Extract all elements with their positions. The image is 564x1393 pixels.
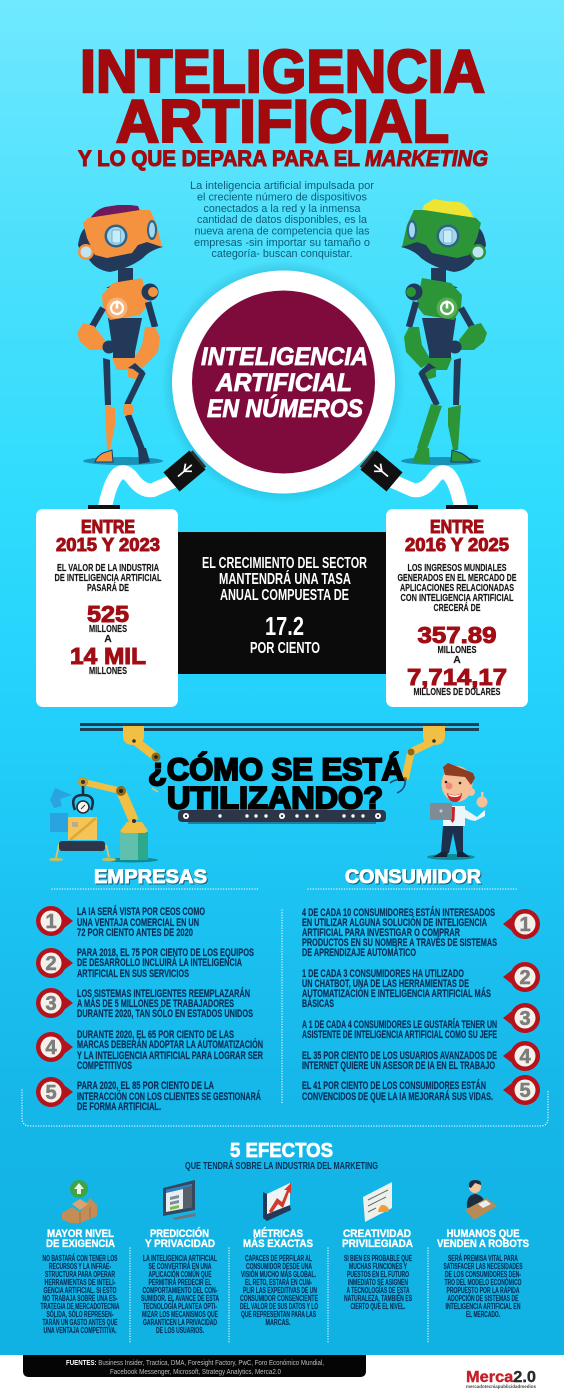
effect: creatividad privilegiada: A TECNOLOGÍAS DE ESTA: [346, 1286, 410, 1295]
item 3: [77, 987, 253, 1020]
marker 2: [36, 948, 73, 978]
item 2: 1 DE CADA 3 CONSUMIDORES HA UTILIZADO: [302, 968, 464, 980]
intro text: [190, 180, 374, 260]
marker 3: [36, 988, 73, 1018]
effect: prediccion y privacidad: APLICACIÓN COMÚN QUE: [148, 1270, 212, 1279]
item 4: MARCAS DEBERÁN ADOPTAR LA AUTOMATIZACIÓN: [77, 1038, 263, 1051]
effect: creatividad privilegiada: MUCHAS FUNCIONES Y: [349, 1262, 407, 1271]
effect: creatividad privilegiada: NATURALEZA, TAMBIÉN ES: [344, 1294, 412, 1303]
marker 4: 4: [45, 1037, 57, 1059]
effect: humanos que venden a robots: ADOPCIÓN DE SISTEMAS DE: [448, 1294, 519, 1303]
item 5: [302, 1079, 493, 1103]
effect: creatividad privilegiada: SI BIEN ES PROBABLE QUE: [344, 1254, 412, 1263]
panel: 2016 to 2025: CON INTELIGENCIA ARTIFICIAL: [400, 593, 514, 604]
item 1: ARTIFICIAL PARA INVESTIGAR O COMPRAR: [302, 927, 460, 939]
effect: mayor nivel de exigencia: SÓLIDA, SÓLO REPRESEN-: [46, 1310, 114, 1319]
heading: 5 efectos: 5 EFECTOS: [230, 1140, 333, 1162]
icon: person at desk: [465, 1180, 497, 1220]
rail: [80, 723, 479, 731]
item 1: [302, 906, 497, 959]
title: INTELIGENCIA: [80, 38, 485, 105]
effect: humanos que venden a robots: INTELIGENCIA ARTIFICIAL EN: [446, 1302, 521, 1311]
item 1: UNA VENTAJA COMERCIAL EN UN: [77, 917, 199, 929]
effect: humanos que venden a robots: [437, 1228, 529, 1319]
robot: orange: [77, 205, 163, 465]
marker 5: 5: [45, 1082, 57, 1104]
footer: sources: [23, 1355, 366, 1377]
item 2: ARTIFICIAL EN SUS SERVICIOS: [77, 968, 189, 980]
title: ARTIFICIAL: [116, 88, 449, 155]
title: MARKETING: [365, 146, 488, 171]
effect: metricas mas exactas: [240, 1227, 318, 1327]
panel: 2015 to 2023: A: [104, 634, 112, 645]
panel: 2016 to 2025: MILLONES DE DÓLARES: [414, 685, 501, 698]
item 4: DURANTE 2020, EL 65 POR CIENTO DE LAS: [77, 1029, 234, 1041]
effect: prediccion y privacidad: MIZAR LOS MECANISMOS QUE: [142, 1310, 218, 1319]
icon: monitor: [163, 1180, 196, 1220]
marker 1: [503, 909, 540, 939]
effect: prediccion y privacidad: [141, 1227, 219, 1335]
effect: creatividad privilegiada: [342, 1228, 413, 1311]
panel: consumidor list: [302, 906, 540, 1105]
circle: en numeros: [162, 260, 406, 504]
heading: 5 efectos: QUE TENDRÁ SOBRE LA INDUSTRIA DEL MARKETING: [185, 1159, 378, 1172]
dotted column dividers: [130, 1248, 428, 1342]
panel: 2015 to 2023: [36, 509, 178, 707]
icon: boxes: [62, 1180, 97, 1223]
icon: businessman with tablet: [427, 763, 488, 860]
panel: growth: 17.2: [265, 611, 304, 641]
item 2: [302, 968, 491, 1010]
usb cable: left: [88, 449, 207, 510]
effect: mayor nivel de exigencia: GENCIA ARTIFICIAL. SI ESTO: [44, 1286, 116, 1295]
circle: en numeros: EN NÚMEROS: [207, 394, 363, 423]
heading: 5 efectos: [185, 1140, 378, 1172]
item 2: UN CHATBOT, UNA DE LAS HERRAMIENTAS DE: [302, 978, 469, 990]
heading: empresas: EMPRESAS: [94, 867, 207, 888]
effect: metricas mas exactas: PLIR LAS EXPEDITIVAS DE UN: [243, 1286, 317, 1295]
panel: empresas list: [36, 905, 263, 1113]
marker 3: 3: [519, 1008, 531, 1030]
heading: consumidor: CONSUMIDOR: [345, 867, 481, 888]
effect: prediccion y privacidad: PERMITIRÁ PREDECIR EL: [148, 1278, 212, 1287]
panel: 2015 to 2023: ENTRE: [81, 517, 135, 537]
marker 2: [503, 962, 540, 992]
marker 4: [36, 1032, 73, 1062]
effect: humanos que venden a robots: VENDEN A ROBOTS: [437, 1238, 529, 1250]
effect: mayor nivel de exigencia: DE EXIGENCIA: [46, 1238, 115, 1250]
dotted panel frame: [22, 889, 548, 1126]
effect: humanos que venden a robots: HUMANOS QUE: [446, 1228, 520, 1240]
logo: merca 2.0: Merca2.0: [466, 1369, 536, 1386]
title: [78, 38, 488, 171]
panel: 2016 to 2025: [386, 509, 528, 707]
heading: como se esta utilizando: ¿CÓMO SE ESTÁ: [148, 751, 404, 787]
item 3: DURANTE 2020, TAN SÓLO EN ESTADOS UNIDOS: [77, 1007, 253, 1020]
effect: humanos que venden a robots: EL MERCADO.: [466, 1310, 500, 1319]
marker 4: [503, 1041, 540, 1071]
item 2: BÁSICAS: [302, 997, 334, 1010]
panel: growth: ANUAL COMPUESTA DE: [220, 587, 349, 604]
panel: 2016 to 2025: CRECERÁ DE: [434, 601, 481, 614]
marker 5: 5: [519, 1080, 531, 1102]
item 2: PARA 2018, EL 75 POR CIENTO DE LOS EQUIPOS: [77, 947, 254, 959]
marker 1: [36, 906, 73, 936]
panel: 2015 to 2023: MILLONES: [89, 666, 127, 677]
logo: merca 2.0: mercadotecniapublicidadmedios: [466, 1384, 536, 1389]
effect: creatividad privilegiada: CREATIVIDAD: [343, 1228, 411, 1240]
icon: chart: [263, 1183, 291, 1221]
item 3: [302, 1018, 497, 1041]
effect: prediccion y privacidad: SE CONVERTIRÁ EN UNA: [148, 1262, 212, 1271]
heading: como se esta utilizando: UTILIZANDO?: [167, 780, 383, 816]
marker 5: [36, 1077, 73, 1107]
item 1: [77, 905, 205, 939]
effect: metricas mas exactas: MÉTRICAS: [253, 1227, 303, 1240]
panel: 2016 to 2025: MILLONES: [438, 645, 477, 656]
effect: mayor nivel de exigencia: MAYOR NIVEL: [47, 1228, 114, 1240]
effect: metricas mas exactas: CAPACES DE PERFILAR AL: [245, 1254, 312, 1263]
item 5: DE FORMA ARTIFICIAL.: [77, 1101, 161, 1113]
effect: metricas mas exactas: DEL VALOR DE SUS DATOS Y LO: [240, 1302, 318, 1311]
item 3: LOS SISTEMAS INTELIGENTES REEMPLAZARÁN: [77, 987, 250, 1000]
intro text: conectados a la red y la inmensa: [204, 203, 361, 215]
effect: prediccion y privacidad: GARANTICEN LA PRIVACIDAD: [143, 1318, 217, 1327]
item 4: Y LA INTELIGENCIA ARTIFICIAL PARA LOGRAR SER: [77, 1050, 263, 1062]
marker 1: 1: [45, 911, 57, 933]
effect: mayor nivel de exigencia: STRUCTURA PARA OPERAR: [45, 1270, 115, 1279]
effect: mayor nivel de exigencia: NO TRABAJA SOBRE UNA ES-: [42, 1294, 118, 1303]
circle: en numeros: ARTIFICIAL: [215, 369, 352, 397]
effect: mayor nivel de exigencia: NO BASTARÁ CON TENER LOS: [42, 1254, 118, 1263]
conveyor belt: [178, 810, 386, 824]
intro text: nueva arena de competencia que las: [194, 226, 370, 238]
item 2: DE DESARROLLO INCLUIRÁ LA INTELIGENCIA: [77, 956, 242, 969]
panel: 2016 to 2025: APLICACIONES RELACIONADAS: [400, 583, 514, 594]
effect: prediccion y privacidad: TECNOLOGÍA PLANTEA OPTI-: [143, 1302, 217, 1311]
effect: mayor nivel de exigencia: [40, 1228, 120, 1335]
effect: prediccion y privacidad: Y PRIVACIDAD: [145, 1238, 215, 1250]
robot: green: [401, 199, 487, 465]
effect: creatividad privilegiada: PUESTOS EN EL FUTURO: [347, 1270, 409, 1279]
intro text: categoría- buscan conquistar.: [212, 248, 352, 260]
effect: mayor nivel de exigencia: UNA VENTAJA COMPETITIVA.: [44, 1326, 116, 1335]
effect: prediccion y privacidad: SUMIDOR. EL AVANCE DE ESTA: [141, 1294, 219, 1303]
title: Y LO QUE DEPARA PARA EL: [78, 146, 360, 171]
item 5: [77, 1080, 261, 1113]
panel: 2015 to 2023: DE INTELIGENCIA ARTIFICIAL: [54, 573, 162, 584]
panel: growth: EL CRECIMIENTO DEL SECTOR: [202, 555, 367, 572]
marker 2: 2: [519, 967, 531, 989]
effect: metricas mas exactas: CONSUMIDOR CONSENCIENTE: [240, 1294, 318, 1303]
item 5: INTERACCIÓN CON LOS CLIENTES SE GESTIONARÁ: [77, 1090, 261, 1103]
effect: mayor nivel de exigencia: TARÁN UN GASTO ANTES QUE: [42, 1318, 118, 1327]
item 5: PARA 2020, EL 85 POR CIENTO DE LA: [77, 1080, 214, 1092]
effect: humanos que venden a robots: SERÁ PREMISA VITAL PARA: [448, 1254, 518, 1263]
panel: growth: [176, 532, 388, 674]
item 3: A MÁS DE 5 MILLONES DE TRABAJADORES: [77, 997, 234, 1010]
intro text: el creciente número de dispositivos: [197, 192, 367, 204]
effect: prediccion y privacidad: PREDICCIÓN: [150, 1227, 209, 1240]
panel: 2016 to 2025: 357.89: [418, 622, 496, 648]
panel: 2015 to 2023: MILLONES: [89, 624, 127, 635]
panel: 2016 to 2025: A: [453, 655, 461, 666]
effect: metricas mas exactas: MÁS EXACTAS: [243, 1237, 313, 1250]
icon: certificate: [363, 1182, 392, 1222]
panel: 2015 to 2023: 14 MIL: [70, 643, 146, 669]
icon: top arm right: [390, 726, 445, 793]
heading: como se esta utilizando: [148, 751, 404, 816]
marker 4: 4: [519, 1046, 531, 1068]
marker 2: 2: [45, 953, 57, 975]
panel: 2015 to 2023: EL VALOR DE LA INDUSTRIA: [57, 563, 159, 574]
effect: mayor nivel de exigencia: TRATEGIA DE MERCADOTECNIA: [40, 1302, 120, 1311]
effect: prediccion y privacidad: LA INTELIGENCIA ARTIFICIAL: [143, 1254, 217, 1263]
effect: metricas mas exactas: QUE REPRESENTAN PARA LAS: [241, 1310, 316, 1319]
item 2: [77, 947, 254, 980]
circle: en numeros: INTELIGENCIA: [201, 343, 368, 371]
panel: growth: MANTENDRÁ UNA TASA: [219, 569, 351, 588]
effect: metricas mas exactas: VISIÓN MUCHO MÁS GLOBAL.: [241, 1270, 316, 1279]
effect: creatividad privilegiada: INMEDIATO SE ASIGNEN: [348, 1278, 408, 1287]
marker 5: [503, 1075, 540, 1105]
item 4: [302, 1050, 497, 1072]
panel: 2016 to 2025: LOS INGRESOS MUNDIALES: [408, 563, 507, 574]
item 1: LA IA SERÁ VISTA POR CEOS COMO: [77, 905, 205, 918]
item 4: [77, 1029, 263, 1072]
panel: 2016 to 2025: 7,714,17: [407, 664, 507, 690]
effect: mayor nivel de exigencia: RECURSOS Y LA INFRAE-: [49, 1262, 111, 1271]
usb cable: right: [359, 449, 478, 510]
effect: creatividad privilegiada: CIERTO QUE EL NIVEL.: [350, 1302, 406, 1311]
icon: top arm left: [123, 726, 160, 792]
panel: 2016 to 2025: 2016 Y 2025: [405, 535, 509, 555]
effect: metricas mas exactas: EL RETO, ESTARÁ EN CUM-: [245, 1278, 312, 1287]
item 1: DE APRENDIZAJE AUTOMÁTICO: [302, 946, 416, 959]
effect: humanos que venden a robots: DE LOS CONSUMIDORES DEN-: [445, 1270, 521, 1279]
marker 3: 3: [45, 993, 57, 1015]
effect: prediccion y privacidad: DE LOS USUARIOS.: [156, 1326, 204, 1335]
effect: metricas mas exactas: CONSUMIDOR DESDE UNA: [246, 1262, 312, 1271]
effect: mayor nivel de exigencia: HERRAMIENTAS DE INTELI-: [44, 1278, 116, 1287]
effect: metricas mas exactas: MARCAS.: [266, 1318, 290, 1327]
panel: 2015 to 2023: 2015 Y 2023: [56, 535, 160, 555]
intro text: La inteligencia artificial impulsada por: [190, 180, 374, 192]
panel: 2015 to 2023: 525: [87, 601, 129, 627]
footer: sources: Facebook Messenger, Microsoft, Strategy Analytics, Merca2.0: [110, 1369, 281, 1376]
intro text: cantidad de datos disponibles, es la: [197, 214, 368, 226]
marker 1: 1: [519, 914, 531, 936]
item 1: 72 POR CIENTO ANTES DE 2020: [77, 927, 193, 939]
icon: factory arm and box: [49, 777, 158, 862]
footer: sources: FUENTES: Business Insider, Tractica, DMA, Foresight Factory, PwC, Foro Económico Mundial,: [66, 1360, 324, 1367]
panel: 2015 to 2023: PASARÁ DE: [87, 581, 129, 594]
item 4: COMPETITIVOS: [77, 1060, 132, 1072]
effect: humanos que venden a robots: PROPUESTO POR LA RÁPIDA: [446, 1286, 520, 1295]
effect: creatividad privilegiada: PRIVILEGIADA: [342, 1238, 413, 1250]
effect: prediccion y privacidad: COMPORTAMIENTO DEL CON-: [142, 1286, 218, 1295]
intro text: empresas -sin importar su tamaño o: [194, 237, 370, 249]
marker 3: [503, 1003, 540, 1033]
panel: growth: POR CIENTO: [250, 640, 320, 657]
panel: 2016 to 2025: ENTRE: [430, 517, 484, 537]
